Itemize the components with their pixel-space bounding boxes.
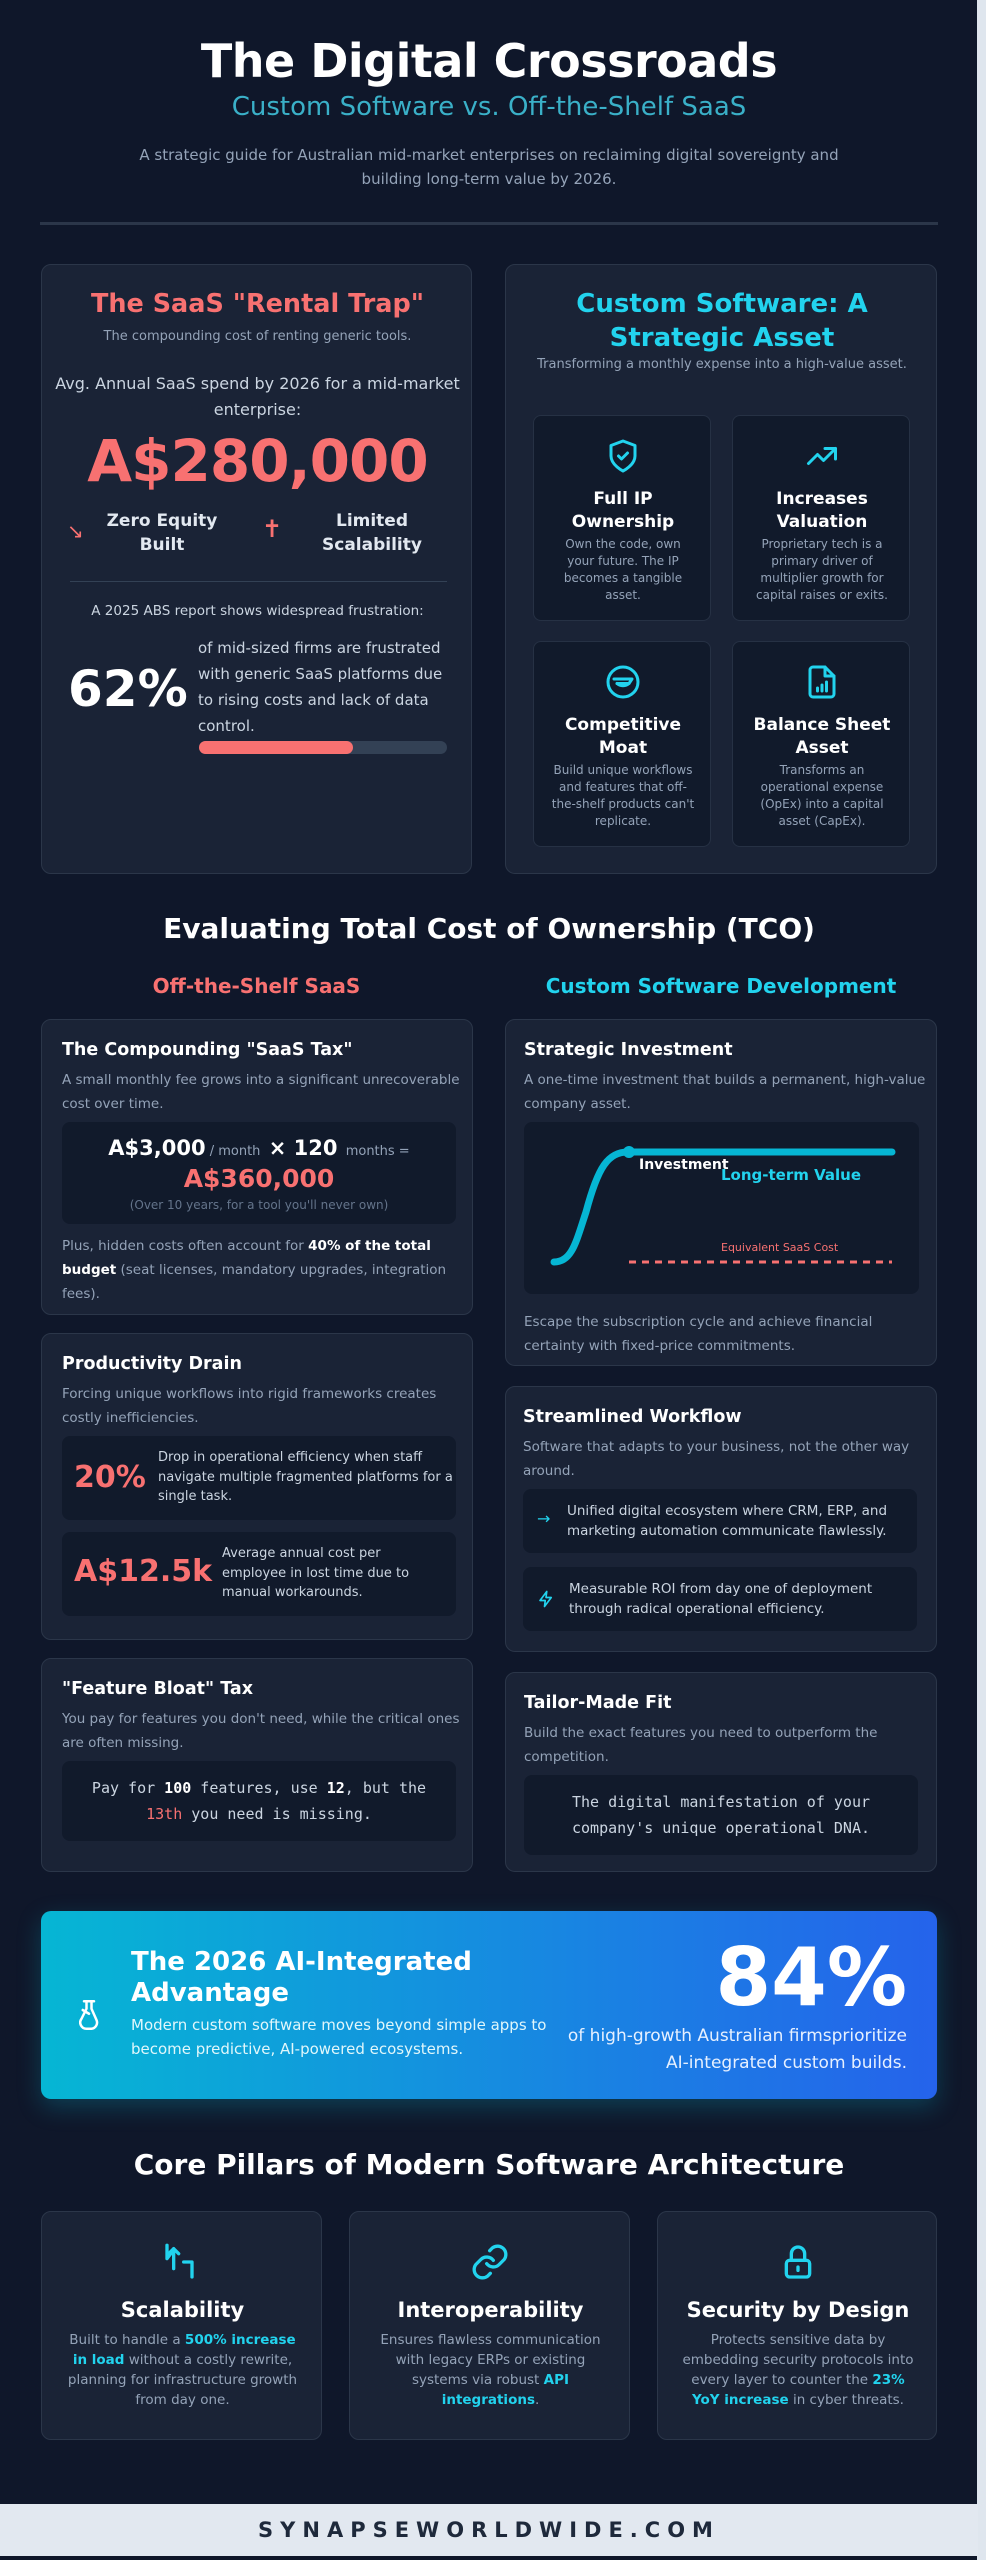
quote box: The digital manifestation of your <box>572 1793 870 1811</box>
card: SaaS Tax: The Compounding "SaaS Tax" <box>62 1040 352 1060</box>
quote box <box>524 1775 918 1855</box>
card: Full IP Ownership: Full IP Ownership <box>572 489 674 532</box>
card: Productivity Drain <box>41 1333 473 1640</box>
card: Tailor-Made Fit <box>505 1672 937 1872</box>
heading: core pillars: Core Pillars of Modern Software Architecture <box>134 2148 844 2181</box>
icon: lock <box>784 2245 812 2279</box>
icon: flask <box>79 2000 98 2030</box>
code box: 13th you need is missing. <box>146 1805 372 1823</box>
intro text: A strategic guide for Australian mid-market enterprises on reclaiming digital sovereignty and building long-term value by 2026. <box>139 146 839 188</box>
icon: limited scalability: ✝ <box>262 515 282 543</box>
stat: A$12.5k <box>62 1532 456 1616</box>
card: Feature Bloat: "Feature Bloat" Tax <box>62 1679 253 1699</box>
card: Strategic Investment: A one-time investment that builds a permanent, high-value company asset. <box>524 1072 925 1112</box>
panel: SaaS rental trap <box>41 264 472 874</box>
row: ROI <box>523 1567 917 1631</box>
chart: investment vs saas cost: Investment <box>639 1157 729 1173</box>
stat: 84%: 84% <box>716 1931 907 2024</box>
text: avg spend: Avg. Annual SaaS spend by 2026 for a mid-market enterprise: <box>55 374 460 419</box>
calc box: A$360,000 <box>184 1164 334 1193</box>
label: zero equity: Zero Equity Built <box>107 511 217 555</box>
card: Balance Sheet Asset: Balance Sheet Asset <box>754 715 890 758</box>
code box <box>62 1761 456 1841</box>
card: Tailor-Made Fit: Build the exact features you need to outperform the competition. <box>524 1725 877 1765</box>
card: Strategic Investment <box>505 1019 937 1366</box>
stat: 62%: 62% <box>68 660 188 718</box>
code box: Pay for 100 features, use 12, but the <box>92 1779 426 1797</box>
card: Increases Valuation: Proprietary tech is a primary driver of multiplier growth for capital raises or exits. <box>756 537 888 602</box>
card: Increases Valuation: Increases Valuation <box>776 489 868 532</box>
card: Streamlined Workflow: Streamlined Workflow <box>523 1407 742 1427</box>
pillar: interoperability <box>349 2211 630 2440</box>
subtitle: Transforming a monthly expense into a high-value asset. <box>537 357 907 372</box>
right edge strip <box>977 0 986 2560</box>
icon: file chart <box>808 666 836 698</box>
heading: Custom Software: A Strategic Asset <box>576 289 868 353</box>
stat: 20%: Drop in operational efficiency when staff navigate multiple fragmented platforms for a single task. <box>158 1450 453 1504</box>
subtitle: The compounding cost of renting generic tools. <box>104 329 411 344</box>
stat: A$12.5k: Average annual cost per employee in lost time due to manual workarounds. <box>222 1546 409 1600</box>
subtitle: Custom Software vs. Off-the-Shelf SaaS <box>232 92 746 122</box>
icon: link <box>472 2244 508 2280</box>
calc box: A$3,000 / month × 120 months = <box>108 1136 410 1160</box>
icon: zero equity: ↘ <box>67 519 84 543</box>
card: SaaS Tax: A small monthly fee grows into a significant unrecoverable cost over time. <box>62 1072 460 1112</box>
card: Competitive Moat: Build unique workflows and features that off-the-shelf products can't replicate. <box>552 763 694 828</box>
stat caption: of high-growth Australian firmsprioritize AI-integrated custom builds. <box>568 2026 907 2073</box>
icon: moat <box>606 666 640 698</box>
heading: TCO: Evaluating Total Cost of Ownership (TCO) <box>163 912 815 945</box>
big number: A$280,000 <box>87 427 428 495</box>
icon: scale arrows <box>165 2244 194 2279</box>
banner title: The 2026 AI-Integrated Advantage <box>131 1947 472 2008</box>
card: Tailor-Made Fit: Tailor-Made Fit <box>524 1693 671 1713</box>
card: Feature Bloat <box>41 1658 473 1872</box>
text: ABS report: A 2025 ABS report shows widespread frustration: <box>91 603 424 619</box>
card: Productivity Drain: Forcing unique workflows into rigid frameworks creates costly inefficiencies. <box>62 1386 436 1426</box>
progress bar <box>199 741 447 754</box>
card: SaaS Tax <box>41 1019 473 1315</box>
quote box: company's unique operational DNA. <box>572 1819 870 1837</box>
text: 62% desc: of mid-sized firms are frustrated with generic SaaS platforms due to rising costs and lack of data control. <box>198 639 442 735</box>
icon: trend up <box>806 446 838 466</box>
pillar: security: Security by Design <box>687 2298 909 2322</box>
calc box <box>62 1122 456 1224</box>
row: unified ecosystem: Unified digital ecosystem where CRM, ERP, and marketing automation communicate flawlessly. <box>567 1503 887 1539</box>
banner: AI advantage <box>41 1911 937 2099</box>
card: Feature Bloat: You pay for features you don't need, while the critical ones are often missing. <box>62 1711 460 1751</box>
chart: investment vs saas cost: Long-term Value <box>721 1166 861 1184</box>
pillar: interoperability: Ensures flawless communication with legacy ERPs or existing systems via robust API integrations. <box>380 2332 601 2408</box>
card: Increases Valuation <box>732 415 910 621</box>
icon: shield <box>610 440 636 472</box>
title: The Digital Crossroads <box>201 34 777 88</box>
row: unified ecosystem <box>523 1489 917 1553</box>
card: Strategic Investment: Strategic Investment <box>524 1040 733 1060</box>
pillar: scalability <box>41 2211 322 2440</box>
pillar: security <box>657 2211 937 2440</box>
column label: Custom: Custom Software Development <box>546 974 896 998</box>
card: Balance Sheet Asset: Transforms an operational expense (OpEx) into a capital asset (CapEx). <box>760 763 884 828</box>
card: Streamlined Workflow: Software that adapts to your business, not the other way around. <box>523 1439 909 1479</box>
card: Full IP Ownership: Own the code, own your future. The IP becomes a tangible asset. <box>564 537 682 602</box>
card: SaaS Tax: Plus, hidden costs often account for 40% of the total budget (seat licenses, mandatory upgrades, integration fees). <box>62 1238 446 1302</box>
pillar: interoperability: Interoperability <box>398 2298 584 2322</box>
card: Competitive Moat <box>533 641 711 847</box>
label: limited scalability: Limited Scalability <box>322 511 422 555</box>
heading: rental trap: The SaaS "Rental Trap" <box>91 289 424 319</box>
banner text: Modern custom software moves beyond simple apps to become predictive, AI-powered ecosystems. <box>131 2016 546 2058</box>
pillar: security: Protects sensitive data by embedding security protocols into every layer to counter the 23% YoY increase in cyber threats. <box>682 2332 914 2408</box>
card: Balance Sheet Asset <box>732 641 910 847</box>
card: Strategic Investment: Escape the subscription cycle and achieve financial certainty with fixed-price commitments. <box>524 1314 872 1354</box>
row: unified ecosystem: → <box>537 1509 550 1528</box>
calc box: (Over 10 years, for a tool you'll never own) <box>130 1198 388 1212</box>
card: Competitive Moat: Competitive Moat <box>565 715 681 758</box>
row: ROI: Measurable ROI from day one of deployment through radical operational efficiency. <box>569 1581 872 1617</box>
chart: investment vs saas cost: Equivalent SaaS Cost <box>721 1241 839 1254</box>
chart: investment vs saas cost <box>524 1122 919 1294</box>
card: Productivity Drain: Productivity Drain <box>62 1354 242 1374</box>
pillar: scalability: Built to handle a 500% increase in load without a costly rewrite, planning for infrastructure growth from day one. <box>68 2332 297 2408</box>
panel: custom software asset <box>505 264 937 874</box>
column label: SaaS: Off-the-Shelf SaaS <box>153 974 360 998</box>
card: Streamlined Workflow <box>505 1386 937 1652</box>
footer <box>0 2504 978 2556</box>
stat: A$12.5k: A$12.5k <box>74 1554 212 1589</box>
stat: 20%: 20% <box>74 1460 146 1495</box>
footer: SYNAPSEWORLDWIDE.COM <box>258 2518 720 2542</box>
stat: 20% <box>62 1436 456 1520</box>
card: Full IP Ownership <box>533 415 711 621</box>
pillar: scalability: Scalability <box>121 2298 244 2322</box>
